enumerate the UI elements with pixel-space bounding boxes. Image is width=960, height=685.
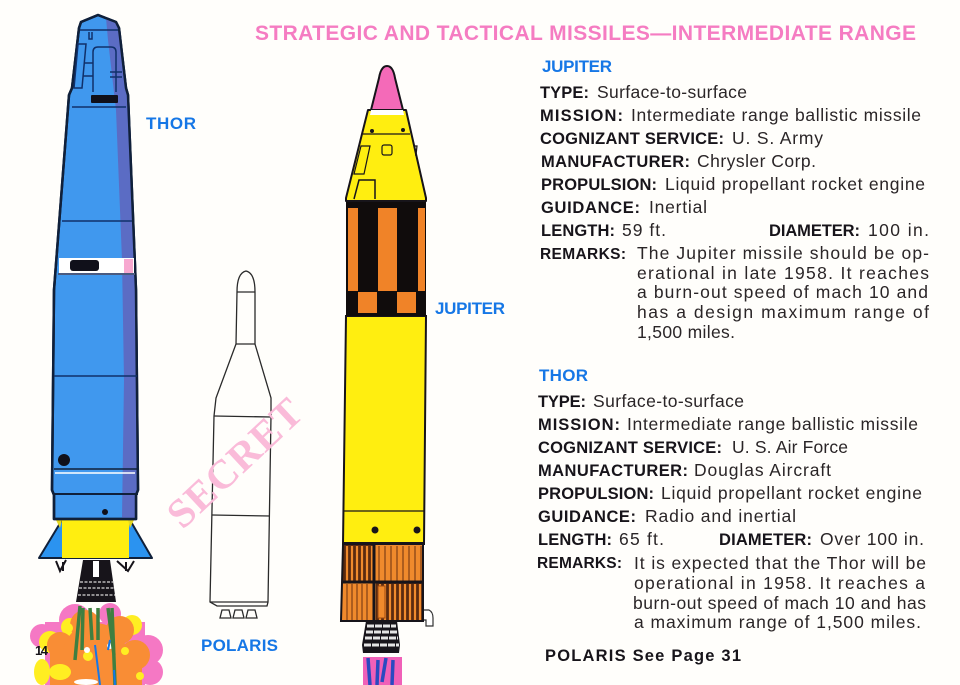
jupiter length and diameter: [541, 220, 929, 240]
thor mission: Intermediate range ballistic missile: [627, 414, 918, 434]
jupiter length and diameter: DIAMETER:: [769, 222, 860, 240]
jupiter heading: JUPITER: [542, 57, 612, 76]
thor label: THOR: [146, 114, 196, 133]
thor missile illustration: [30, 15, 163, 685]
jupiter type: Surface-to-surface: [597, 82, 747, 102]
jupiter propulsion: Liquid propellant rocket engine: [665, 174, 925, 194]
jupiter length and diameter: 59 ft.: [622, 220, 666, 240]
thor service: COGNIZANT SERVICE:: [538, 439, 722, 457]
jupiter cone details: [354, 134, 417, 199]
jupiter pink nose: [371, 66, 403, 110]
jupiter remarks: has a design maximum range of: [637, 302, 929, 322]
jupiter remarks: 1,500 miles.: [637, 322, 735, 342]
thor lower joint lines: [54, 468, 137, 470]
polaris missile illustration: [210, 271, 271, 618]
thor type: TYPE:: [538, 393, 586, 411]
jupiter exhaust: [363, 657, 402, 685]
jupiter guidance: [541, 197, 707, 217]
thor manufacturer: MANUFACTURER:: [538, 462, 688, 480]
thor length and diameter: DIAMETER:: [719, 531, 812, 549]
jupiter remarks: REMARKS:: [540, 246, 626, 263]
jupiter bracket: [423, 610, 433, 626]
thor guidance: Radio and inertial: [645, 506, 796, 526]
thor nose details: [54, 30, 137, 376]
thor service: U. S. Air Force: [732, 437, 848, 457]
jupiter remarks: The Jupiter missile should be op-: [637, 243, 929, 263]
thor remarks: operational in 1958. It reaches a: [634, 573, 925, 593]
jupiter service: U. S. Army: [732, 128, 823, 148]
jupiter remarks: erational in late 1958. It reaches: [637, 263, 929, 283]
jupiter length and diameter: LENGTH:: [541, 222, 615, 240]
thor length and diameter: LENGTH:: [538, 531, 612, 549]
thor guidance: GUIDANCE:: [538, 508, 636, 526]
jupiter missile illustration: [341, 66, 433, 685]
jupiter manufacturer: [541, 151, 816, 171]
jupiter label: JUPITER: [435, 299, 505, 318]
thor type: Surface-to-surface: [593, 391, 744, 411]
thor exhaust fireball: [30, 603, 163, 685]
thor fins and yellow tail: [39, 519, 152, 558]
thor manufacturer: Douglas Aircraft: [694, 460, 831, 480]
thor service: [538, 437, 848, 457]
thor shaded side: [106, 18, 137, 518]
thor length and diameter: Over 100 in.: [820, 529, 924, 549]
thor specification block: [537, 366, 926, 632]
thor heading: THOR: [539, 366, 588, 385]
jupiter length and diameter: 100 in.: [868, 220, 929, 240]
jupiter yellow cone: [346, 110, 426, 201]
thor outline: [52, 15, 138, 519]
thor propulsion: PROPULSION:: [538, 485, 654, 503]
jupiter white stripe: [370, 110, 404, 115]
secret stamp: SECRET: [157, 389, 312, 537]
jupiter tail section: [341, 545, 423, 621]
thor remarks: REMARKS:: [537, 555, 622, 572]
page number: 14: [35, 643, 49, 658]
jupiter specification block: [540, 57, 929, 342]
jupiter remarks: [540, 243, 929, 342]
thor body: [52, 15, 138, 519]
jupiter manufacturer: Chrysler Corp.: [697, 151, 816, 171]
thor manufacturer: [538, 460, 831, 480]
thor propulsion: [538, 483, 922, 503]
jupiter mission: MISSION:: [540, 107, 623, 125]
thor remarks: burn-out speed of mach 10 and has: [633, 593, 926, 613]
jupiter manufacturer: MANUFACTURER:: [541, 153, 690, 171]
jupiter guidance: Inertial: [649, 197, 707, 217]
thor length and diameter: 65 ft.: [619, 529, 664, 549]
polaris page reference: POLARIS See Page 31: [545, 647, 741, 665]
jupiter remarks: a burn-out speed of mach 10 and: [637, 282, 928, 302]
jupiter type: TYPE:: [540, 84, 589, 102]
thor white band: [59, 258, 134, 273]
jupiter service: COGNIZANT SERVICE:: [540, 130, 724, 148]
thor propulsion: Liquid propellant rocket engine: [661, 483, 922, 503]
jupiter black and orange section: [346, 200, 426, 316]
jupiter yellow body: [343, 316, 426, 544]
thor mission: MISSION:: [538, 416, 620, 434]
thor remarks: a maximum range of 1,500 miles.: [634, 612, 921, 632]
thor guidance: [538, 506, 796, 526]
thor remarks: It is expected that the Thor will be: [634, 553, 926, 573]
thor remarks: [537, 553, 926, 632]
jupiter propulsion: [541, 174, 925, 194]
jupiter propulsion: PROPULSION:: [541, 176, 657, 194]
thor length and diameter: [538, 529, 924, 549]
jupiter guidance: GUIDANCE:: [541, 199, 640, 217]
jupiter mission: Intermediate range ballistic missile: [631, 105, 921, 125]
thor small port: [102, 509, 108, 515]
thor engine nozzle: [56, 560, 134, 602]
polaris label: POLARIS: [201, 636, 278, 655]
thor black hatch: [91, 95, 118, 103]
jupiter service: [540, 128, 823, 148]
title: STRATEGIC AND TACTICAL MISSILES—INTERMEDIATE RANGE: [255, 22, 916, 45]
jupiter nozzle: [362, 621, 400, 653]
thor round port: [58, 454, 70, 466]
